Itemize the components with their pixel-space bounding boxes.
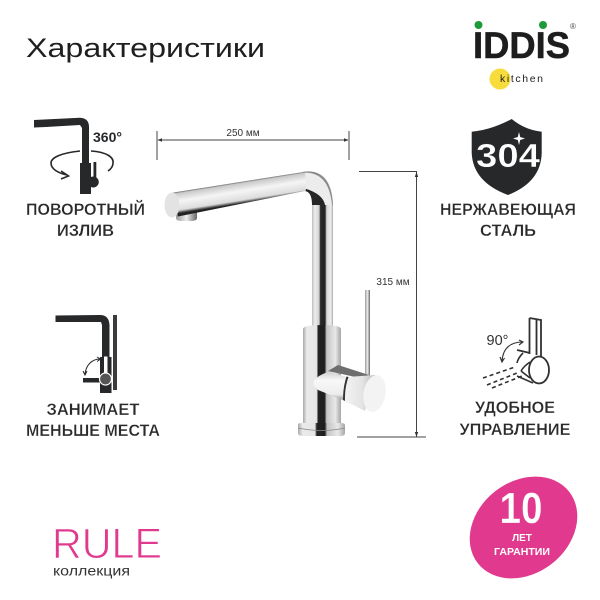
dimension: height 315 mm <box>357 172 426 437</box>
icon: easy control lever: 90° <box>486 333 508 349</box>
dimension: width 250 mm: 250 мм <box>226 128 260 139</box>
logo: IDDIS kitchen: kitchen <box>500 73 543 85</box>
logo: IDDIS kitchen: IDDIS <box>473 25 570 66</box>
badge: 10 years warranty: 10 <box>500 484 542 533</box>
collection name: RULE <box>52 520 162 568</box>
base flange <box>298 423 345 436</box>
icon: takes less space <box>56 315 117 393</box>
icon: 360 degree swivel spout: 360° <box>93 129 122 145</box>
faucet <box>164 171 389 436</box>
icon: 304 shield <box>472 119 542 195</box>
spout end cap <box>164 192 180 218</box>
spout corner <box>303 172 333 205</box>
icon: easy control lever <box>483 318 549 388</box>
vertical riser <box>312 205 333 328</box>
lever rod <box>365 290 370 378</box>
logo: IDDIS kitchen <box>473 21 576 90</box>
dimension: width 250 mm <box>157 128 349 160</box>
handle cylinder <box>314 372 347 400</box>
label: swivel spout: ПОВОРОТНЫЙ <box>26 200 145 219</box>
label: easy control: УДОБНОЕ <box>475 399 555 417</box>
body <box>303 325 341 425</box>
icon: 304 shield: 304 <box>476 137 541 174</box>
label: stainless steel: НЕРЖАВЕЮЩАЯ <box>440 201 576 219</box>
badge: 10 years warranty <box>449 456 598 599</box>
badge: 10 years warranty: ЛЕТ <box>512 533 532 544</box>
aerator <box>176 212 197 221</box>
title: Характеристики <box>26 33 265 63</box>
icon: 360 degree swivel spout <box>34 118 122 194</box>
badge: 10 years warranty: ГАРАНТИИ <box>494 546 550 558</box>
label: stainless steel: СТАЛЬ <box>480 222 536 240</box>
label: takes less space: ЗАНИМАЕТ <box>46 401 140 419</box>
collection name: коллекция <box>53 562 130 578</box>
spout arm <box>172 172 306 216</box>
label: easy control: УПРАВЛЕНИЕ <box>460 421 570 439</box>
label: takes less space: МЕНЬШЕ МЕСТА <box>26 422 160 440</box>
dimension: height 315 mm: 315 мм <box>376 277 410 288</box>
handle end cap <box>360 373 389 414</box>
label: swivel spout: ИЗЛИВ <box>57 222 114 240</box>
handle collar <box>328 365 369 378</box>
logo: IDDIS kitchen: ® <box>570 22 576 31</box>
